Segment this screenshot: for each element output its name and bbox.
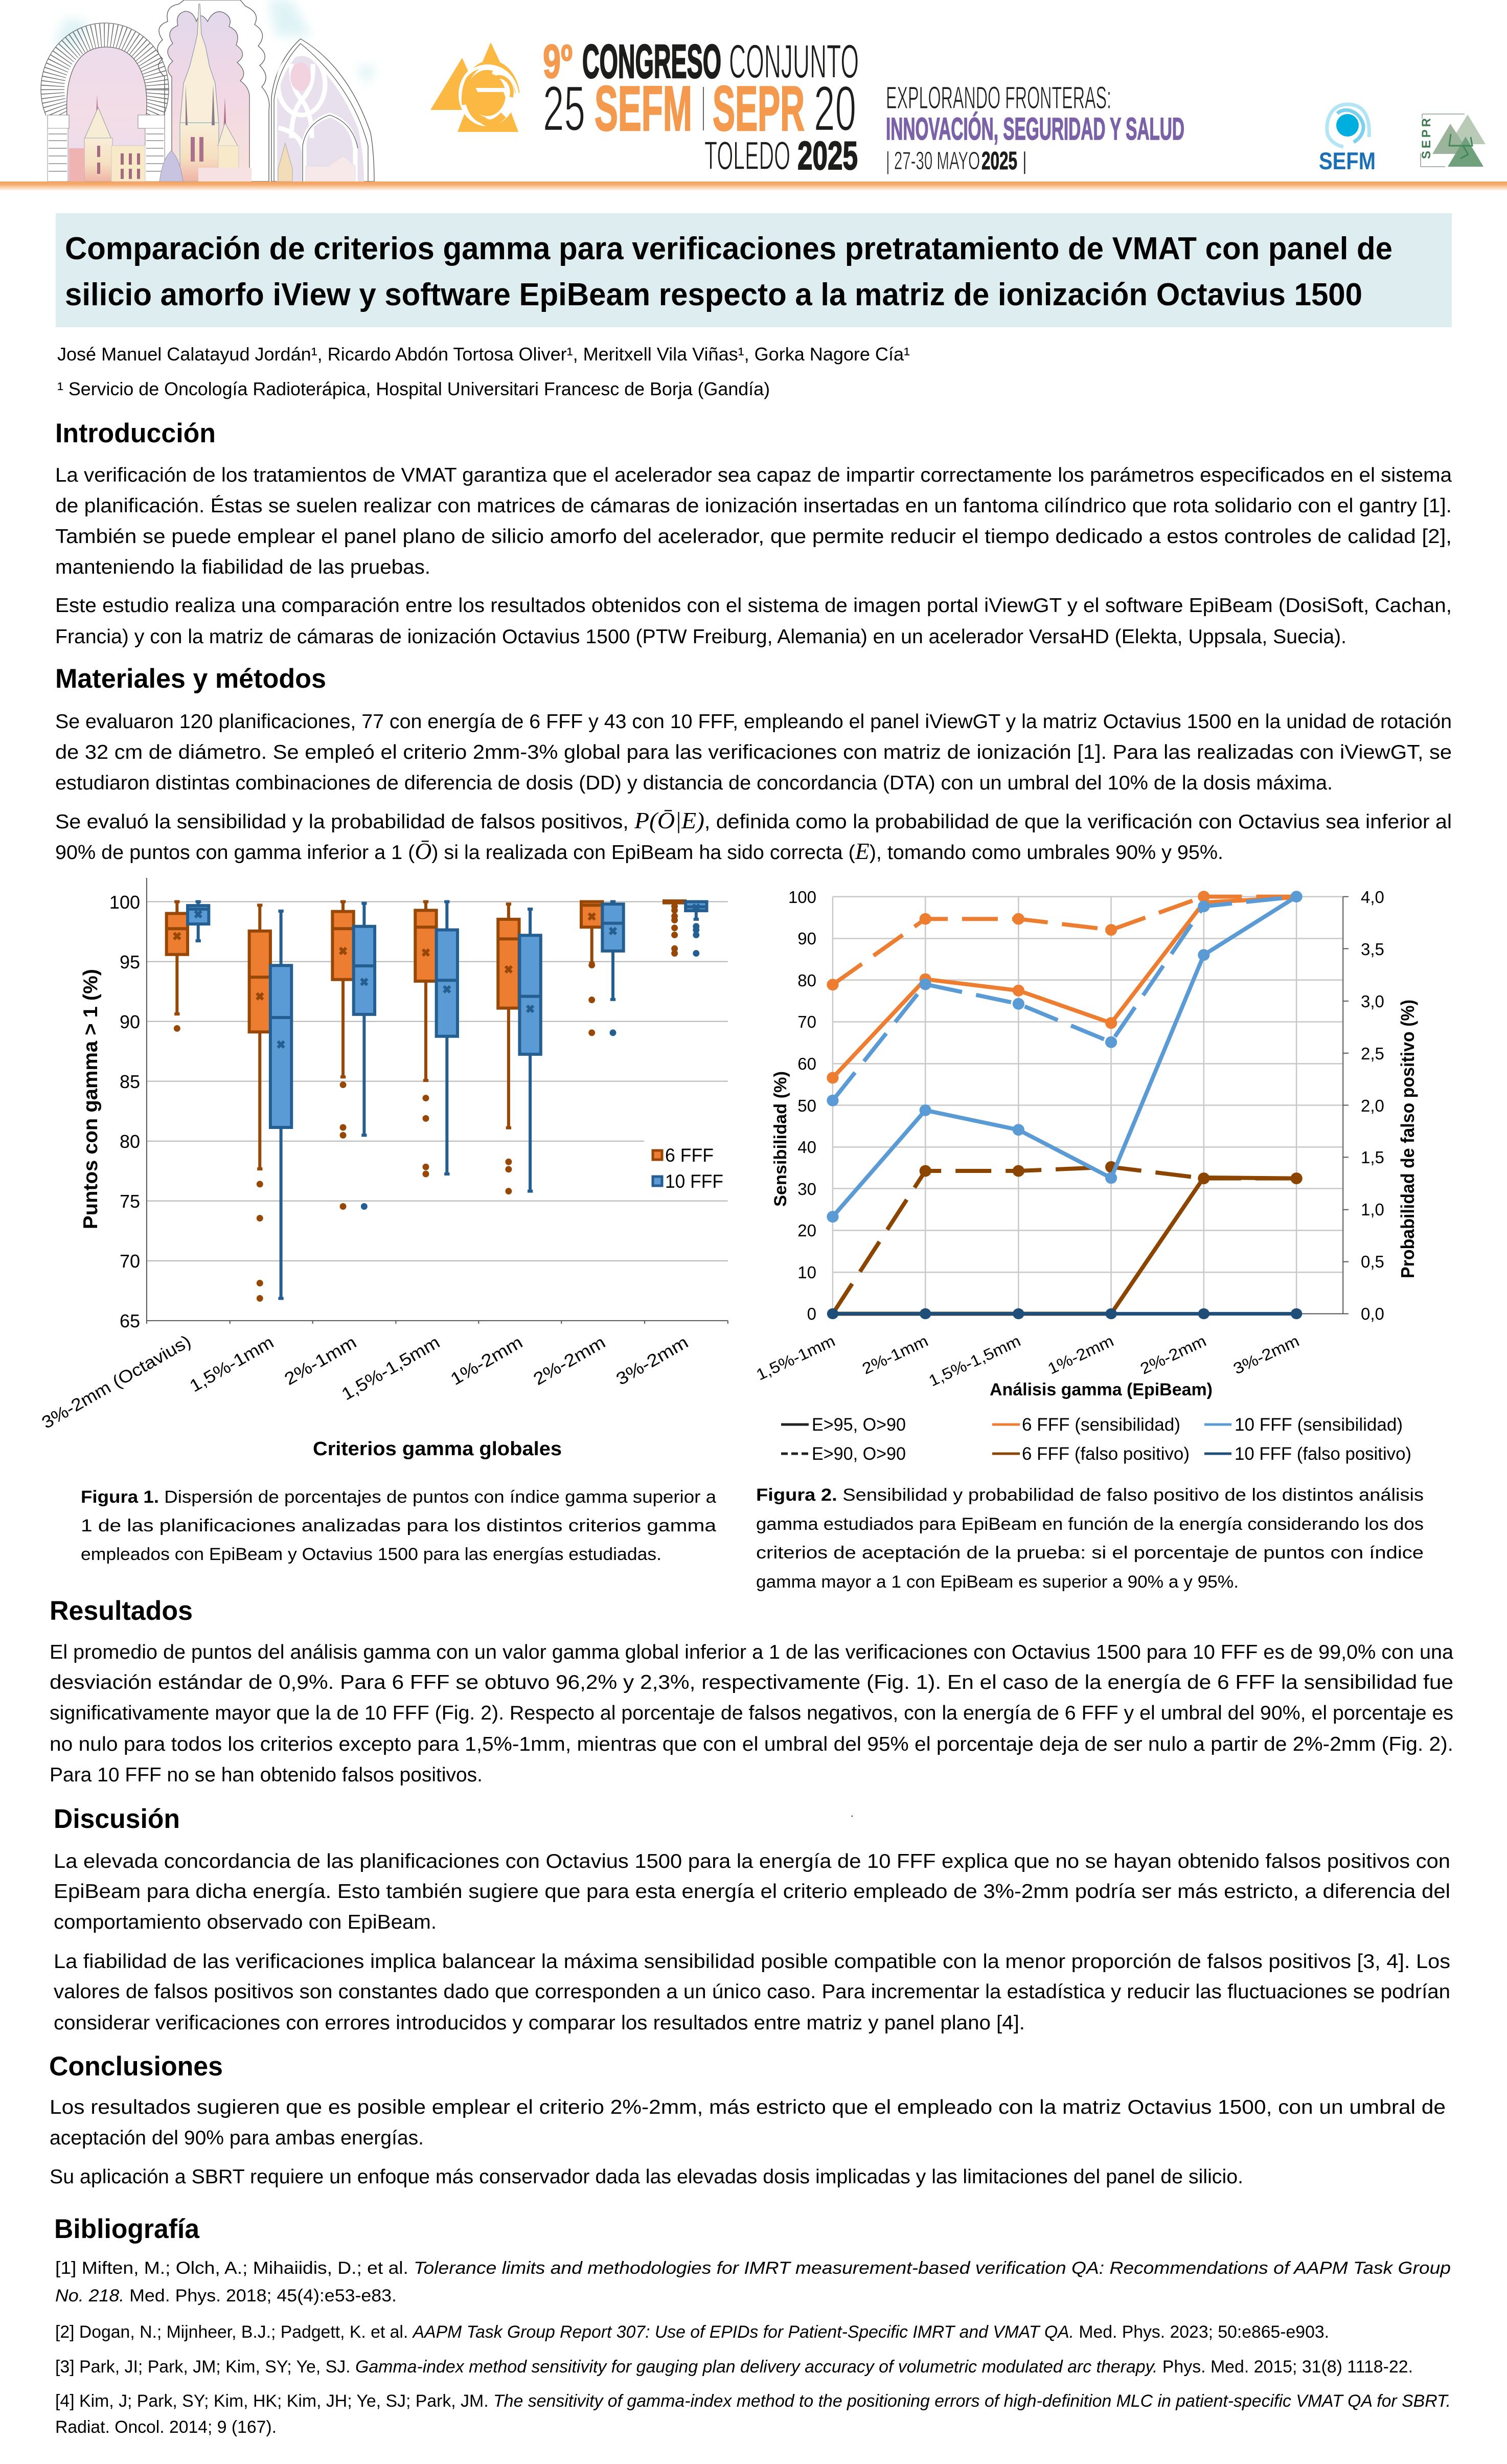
text: results paragraph: desviación estándar de 0,9%. Para 6 FFF se obtuvo 96,2% y 2,3%, respectivamente (Fig. 1). En el caso de la energía de 6 FFF la sensibilidad fue — [50, 1671, 1453, 1693]
reference 4: [4] Kim, J; Park, SY; Kim, HK; Kim, JH; Ye, SJ; Park, JM. The sensitivity of gamma-index method to the positioning errors of high-definition MLC in patient-specific VMAT QA for SBRT. — [55, 2391, 1451, 2411]
chart: Figure 2 line chart — [754, 888, 1418, 1464]
reference 1 — [55, 2258, 1451, 2305]
heading: Bibliografía: Bibliografía — [54, 2214, 200, 2244]
stray dot: . — [851, 1808, 854, 1819]
title box — [56, 213, 1452, 327]
congress title: SEFM — [595, 74, 692, 144]
x axis category labels — [38, 1331, 692, 1433]
section: Conclusiones — [49, 2051, 1446, 2188]
right axis tick labels: 0,5 — [1361, 1252, 1384, 1271]
congress title: 9º — [543, 35, 573, 88]
caption: Figure 1: Figura 1. Dispersión de porcentajes de puntos con índice gamma superior a — [81, 1487, 716, 1507]
category labels: 2%-2mm — [1137, 1332, 1209, 1378]
heading: Materiales y métodos: Materiales y métodos — [55, 664, 326, 694]
heading: Conclusiones: Conclusiones — [49, 2051, 223, 2082]
congress title: 25 — [543, 74, 585, 144]
icon: SEPR logo — [1420, 114, 1486, 167]
left axis tick labels: 90 — [797, 929, 816, 948]
y axis tick labels: 90 — [120, 1011, 140, 1032]
y axis tick labels: 65 — [120, 1310, 140, 1331]
category labels: 2%-1mm — [859, 1332, 931, 1378]
left axis title: Sensibilidad (%) — [771, 1071, 790, 1207]
header banner — [0, 0, 1507, 191]
authors: José Manuel Calatayud Jordán¹, Ricardo Abdón Tortosa Oliver¹, Meritxell Vila Viñas¹, Gorka Nagore Cía¹ — [57, 344, 910, 365]
text: intro paragraph 2 — [55, 595, 1452, 648]
congress slogan — [886, 80, 1184, 175]
left axis tick labels: 20 — [797, 1221, 816, 1240]
x axis category labels: 1%-2mm — [447, 1332, 526, 1389]
left axis tick labels: 70 — [797, 1012, 816, 1031]
caption: Figure 2: criterios de aceptación de la prueba: si el porcentaje de puntos con índice — [756, 1543, 1424, 1563]
legend — [781, 1415, 1411, 1464]
title box: silicio amorfo iView y software EpiBeam respecto a la matriz de ionización Octavius 1500 — [65, 277, 1362, 312]
y axis tick labels: 85 — [120, 1071, 140, 1092]
right axis tick labels: 0,0 — [1361, 1304, 1384, 1323]
x axis category labels: 2%-1mm — [281, 1332, 360, 1389]
series: 10 FFF sensitivity — [827, 891, 1303, 1223]
icon: SEFM logo — [1319, 104, 1376, 174]
legend: 6 FFF (sensibilidad) — [1022, 1415, 1180, 1435]
series: 10 FFF false positive — [827, 1308, 1302, 1319]
congress slogan: 2025 — [981, 147, 1017, 175]
x axis title: Criterios gamma globales — [313, 1438, 562, 1460]
reference 3: [3] Park, JI; Park, JM; Kim, SY; Ye, SJ. Gamma-index method sensitivity for gauging plan delivery accuracy of volumetric modulated arc therapy. Phys. Med. 2015; 31(8) 1118-22. — [55, 2357, 1413, 2377]
congress title: SEPR — [713, 74, 805, 144]
illustration: Toledo arches and skyline — [41, 0, 376, 182]
congress slogan: | — [1021, 147, 1028, 175]
caption: Figure 2 — [756, 1485, 1424, 1592]
section: Resultados — [50, 1596, 1453, 1786]
x axis title: Análisis gamma (EpiBeam) — [990, 1380, 1213, 1399]
line chart plot area and series — [827, 891, 1349, 1319]
x axis category labels: 3%-2mm (Octavius) — [38, 1331, 194, 1433]
text: intro paragraph 2: Este estudio realiza una comparación entre los resultados obtenidos con el sistema de imagen portal iViewGT y el software EpiBeam (DosiSoft, Cachan, — [55, 595, 1452, 617]
legend: 6 FFF (falso positivo) — [1022, 1444, 1190, 1464]
left axis tick labels: 40 — [797, 1138, 816, 1157]
left axis tick labels: 60 — [797, 1054, 816, 1073]
caption: Figure 2: gamma mayor a 1 con EpiBeam es superior a 90% a y 95%. — [756, 1572, 1239, 1592]
text: discussion paragraph 2: La fiabilidad de las verificaciones implica balancear la máxima sensibilidad posible compatible con la menor proporción de falsos positivos [3, 4]. Los — [54, 1951, 1450, 1973]
icon: SEPR logo: SEPR — [1420, 118, 1433, 159]
congress title: 20 — [814, 74, 856, 144]
reference 1: [1] Miften, M.; Olch, A.; Mihaiidis, D.; et al. Tolerance limits and methodologies for IMRT measurement-based verification QA: Recommendations of AAPM Task Group — [55, 2258, 1451, 2278]
category labels: 1,5%-1mm — [754, 1332, 838, 1384]
left axis tick labels: 0 — [807, 1304, 816, 1323]
y axis tick labels: 75 — [120, 1191, 140, 1212]
text: intro paragraph 1: manteniendo la fiabilidad de las pruebas. — [55, 556, 430, 578]
text: results paragraph: Para 10 FFF no se han obtenido falsos positivos. — [50, 1764, 483, 1786]
left axis tick labels: 50 — [797, 1096, 816, 1115]
text: methods paragraph 2: 90% de puntos con gamma inferior a 1 (Ō) si la realizada con EpiBeam ha sido correcta ( E), tomando como umbrales 90% y 95%. — [55, 839, 1223, 864]
right axis tick labels: 4,0 — [1361, 888, 1384, 907]
text: discussion paragraph 1: EpiBeam para dicha energía. Esto también sugiere que para esta energía el criterio empleado de 3%-2mm podría ser más estricto, a diferencia del — [54, 1881, 1450, 1903]
section: Bibliografía — [54, 2214, 1451, 2437]
right axis tick labels: 1,5 — [1361, 1148, 1384, 1167]
left axis tick labels: 10 — [797, 1263, 816, 1282]
reference 4: Radiat. Oncol. 2014; 9 (167). — [55, 2417, 277, 2437]
left axis tick labels: 80 — [797, 971, 816, 990]
text: methods paragraph 1: de 32 cm de diámetro. Se empleó el criterio 2mm-3% global para las verificaciones con matriz de ionización [1]. Para las realizadas con iViewGT, se — [55, 741, 1452, 763]
chart: Figure 1 box plots — [38, 878, 728, 1460]
box plot gridlines, axes and boxes — [147, 878, 728, 1324]
series: 6 FFF sensitivity — [827, 891, 1296, 1083]
congress slogan: INNOVACIÓN, SEGURIDAD Y SALUD — [886, 111, 1184, 146]
text: conclusions paragraph 1 — [50, 2096, 1446, 2149]
text: results paragraph: no nulo para todos los criterios excepto para 1,5%-1mm, mientras que con el umbral del 95% el porcentaje deja de ser nulo a partir de 2%-2mm (Fig. 2). — [50, 1733, 1453, 1755]
text: discussion paragraph 1 — [54, 1850, 1450, 1933]
x axis category labels: 1,5%-1,5mm — [338, 1332, 443, 1404]
legend: 10 FFF (sensibilidad) — [1235, 1415, 1403, 1435]
category labels: 3%-2mm — [1230, 1332, 1302, 1378]
x axis category labels: 1,5%-1mm — [187, 1332, 277, 1396]
legend — [653, 1145, 723, 1192]
icon: congress logo triangles — [430, 42, 518, 132]
text: results paragraph — [50, 1641, 1453, 1786]
section: Discusión — [54, 1804, 1450, 2034]
text: intro paragraph 2: Francia) y con la matriz de cámaras de ionización Octavius 1500 (PTW Freiburg, Alemania) en un acelerador VersaHD (Elekta, Uppsala, Suecia). — [55, 626, 1346, 648]
text: discussion paragraph 1: comportamiento observado con EpiBeam. — [54, 1911, 437, 1933]
right axis tick labels: 2,5 — [1361, 1044, 1384, 1063]
reference 4 — [55, 2391, 1451, 2437]
congress slogan: | 27-30 MAYO — [886, 147, 980, 175]
orange divider band — [0, 182, 1507, 191]
text: intro paragraph 1: de planificación. Éstas se suelen realizar con matrices de cámaras de ionización insertadas en un fantoma cilíndrico que rota solidario con el gantry [1]. — [55, 495, 1452, 517]
heading: Discusión: Discusión — [54, 1804, 180, 1834]
legend: E>95, O>90 — [812, 1415, 906, 1435]
x axis category labels: 2%-2mm — [530, 1332, 609, 1389]
caption: Figure 1 — [81, 1487, 716, 1564]
text: results paragraph: El promedio de puntos del análisis gamma con un valor gamma global inferior a 1 de las verificaciones con Octavius 1500 para 10 FFF es de 99,0% con una — [50, 1641, 1453, 1663]
header banner: CONJUNTO — [729, 35, 859, 88]
reference 1: No. 218. Med. Phys. 2018; 45(4):e53-e83. — [55, 2286, 397, 2305]
text: results paragraph: significativamente mayor que la de 10 FFF (Fig. 2). Respecto al porcentaje de falsos negativos, con la energía de 6 FFF y el umbral del 90%, el porcentaje es — [50, 1702, 1453, 1724]
y axis tick labels — [109, 892, 140, 1331]
heading: Introducción: Introducción — [55, 418, 216, 448]
legend: 10 FFF (falso positivo) — [1235, 1444, 1411, 1464]
text: intro paragraph 1: También se puede emplear el panel plano de silicio amorfo del acelerador, que permite reducir el tiempo dedicado a estos controles de calidad [2], — [55, 526, 1452, 548]
title box: Comparación de criterios gamma para verificaciones pretratamiento de VMAT con panel de — [65, 231, 1392, 266]
left axis tick labels: 30 — [797, 1180, 816, 1199]
right axis tick labels: 3,0 — [1361, 992, 1384, 1011]
congress title: 2025 — [797, 133, 858, 178]
text: methods paragraph 2: Se evaluó la sensibilidad y la probabilidad de falsos positivos, P(Ō|E), definida como la probabilidad de que la verificación con Octavius sea inferior al — [55, 808, 1452, 833]
section: Introducción — [55, 418, 1452, 648]
congress slogan: EXPLORANDO FRONTERAS: — [886, 80, 1111, 115]
legend: 6 FFF — [665, 1145, 714, 1166]
y axis tick labels: 95 — [120, 952, 140, 973]
right axis tick labels: 2,0 — [1361, 1096, 1384, 1115]
congress title: TOLEDO — [704, 133, 790, 178]
left axis tick labels: 100 — [788, 888, 816, 907]
congress title — [543, 35, 859, 178]
caption: Figure 2: Figura 2. Sensibilidad y probabilidad de falso positivo de los distintos análisis — [756, 1485, 1424, 1505]
caption: Figure 1: empleados con EpiBeam y Octavius 1500 para las energías estudiadas. — [81, 1545, 661, 1564]
text: methods paragraph 2 — [55, 808, 1452, 864]
text: discussion paragraph 2: considerar verificaciones con errores introducidos y comparar los resultados entre matriz y panel plano [4]. — [54, 2012, 1025, 2034]
legend: 10 FFF — [665, 1171, 723, 1192]
affiliation: ¹ Servicio de Oncología Radioterápica, Hospital Universitari Francesc de Borja (Gandía) — [57, 378, 770, 399]
left axis tick labels — [788, 888, 816, 1323]
right axis tick labels — [1361, 888, 1384, 1323]
reference 2: [2] Dogan, N.; Mijnheer, B.J.; Padgett, K. et al. AAPM Task Group Report 307: Use of EPIDs for Patient-Specific IMRT and VMAT QA. Med. Phys. 2023; 50:e865-e903. — [55, 2322, 1329, 2342]
text: discussion paragraph 1: La elevada concordancia de las planificaciones con Octavius 1500 para la energía de 10 FFF explica que no se hayan obtenido falsos positivos con — [54, 1850, 1450, 1872]
caption: Figure 1: 1 de las planificaciones analizadas para los distintos criterios gamma — [81, 1516, 716, 1535]
text: discussion paragraph 2 — [54, 1951, 1450, 2034]
legend: E>90, O>90 — [812, 1444, 906, 1464]
category labels — [754, 1332, 1302, 1390]
x axis category labels: 3%-2mm — [613, 1332, 692, 1389]
text: methods paragraph 1: Se evaluaron 120 planificaciones, 77 con energía de 6 FFF y 43 con 10 FFF, empleando el panel iViewGT y la matriz Octavius 1500 en la unidad de rotación — [55, 711, 1452, 733]
y axis title: Puntos con gamma > 1 (%) — [80, 969, 102, 1229]
category labels: 1%-2mm — [1045, 1332, 1116, 1378]
caption: Figure 2: gamma estudiados para EpiBeam en función de la energía considerando los dos — [756, 1514, 1424, 1534]
icon: SEFM logo: SEFM — [1319, 147, 1376, 174]
text: methods paragraph 1: estudiaron distintas combinaciones de diferencia de dosis (DD) y distancia de concordancia (DTA) con un umbral del 10% de la dosis máxima. — [55, 772, 1333, 794]
heading: Resultados: Resultados — [50, 1596, 193, 1626]
right axis title: Probabilidad de falso positivo (%) — [1397, 1000, 1418, 1278]
category labels: 1,5%-1,5mm — [926, 1332, 1023, 1390]
right axis tick labels: 3,5 — [1361, 940, 1384, 959]
text: conclusions paragraph 2: Su aplicación a SBRT requiere un enfoque más conservador dada las elevadas dosis implicadas y las limitaciones del panel de silicio. — [50, 2166, 1243, 2188]
text: methods paragraph 1 — [55, 711, 1452, 794]
y axis tick labels: 80 — [120, 1131, 140, 1152]
y axis tick labels: 100 — [109, 892, 140, 913]
text: conclusions paragraph 1: aceptación del 90% para ambas energías. — [50, 2127, 424, 2149]
section: Materiales y métodos — [55, 664, 1452, 864]
congress title: CONGRESO — [582, 35, 721, 88]
right axis tick labels: 1,0 — [1361, 1200, 1384, 1219]
text: intro paragraph 1 — [55, 464, 1452, 578]
text: conclusions paragraph 1: Los resultados sugieren que es posible emplear el criterio 2%-2mm, más estricto que el empleado con la matriz Octavius 1500, con un umbral de — [50, 2096, 1446, 2118]
series: 6 FFF false positive — [833, 1161, 1303, 1314]
y axis tick labels: 70 — [120, 1251, 140, 1272]
text: intro paragraph 1: La verificación de los tratamientos de VMAT garantiza que el acelerador sea capaz de impartir correctamente los parámetros especificados en el sistema — [55, 464, 1452, 486]
text: discussion paragraph 2: valores de falsos positivos son constantes dado que corresponden a un único caso. Para incrementar la estadística y reducir las fluctuaciones se podrían — [54, 1981, 1450, 2003]
